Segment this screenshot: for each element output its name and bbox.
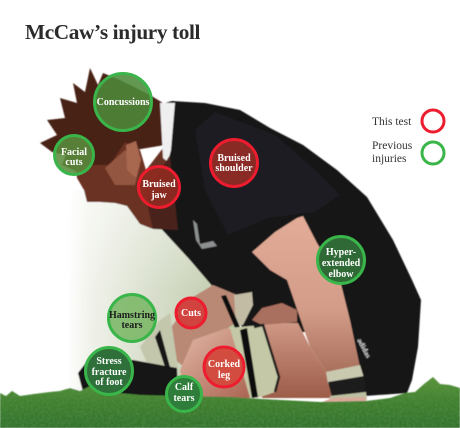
knee sock xyxy=(230,325,279,398)
callout: stress fracture of foot: Stress xyxy=(96,356,122,367)
callout: calf tears: Calf xyxy=(175,382,194,393)
callout: cuts xyxy=(176,298,206,328)
face xyxy=(75,142,168,229)
upper arm xyxy=(252,216,360,373)
callout: facial cuts: Facial xyxy=(61,147,87,158)
callout: hamstring tears: Hamstring xyxy=(109,310,155,321)
legend xyxy=(372,110,444,165)
bent-leg shin xyxy=(167,285,242,366)
callout: cuts: Cuts xyxy=(181,308,201,319)
callout: bruised shoulder: Bruised xyxy=(217,153,251,164)
legend: previous injuries: injuries xyxy=(372,153,407,165)
hand xyxy=(221,292,297,328)
fingers on grass xyxy=(320,397,368,407)
callout: hyper-extended elbow xyxy=(318,236,364,284)
callout: corked leg xyxy=(204,347,244,387)
legend: previous injuries: Previous xyxy=(372,140,413,152)
title: McCaw’s injury toll xyxy=(25,20,200,44)
boot xyxy=(78,360,178,398)
callout: hamstring tears xyxy=(108,294,156,342)
callout: bruised shoulder: shoulder xyxy=(215,163,253,174)
collar xyxy=(160,103,175,162)
jersey highlight xyxy=(195,112,340,235)
callout: facial cuts xyxy=(54,136,94,174)
callout: bruised jaw: Bruised xyxy=(142,179,176,190)
callout: stress fracture of foot: fracture xyxy=(92,367,127,378)
hair xyxy=(40,68,165,172)
jersey xyxy=(155,101,421,396)
callout: concussions xyxy=(94,74,152,130)
thigh xyxy=(250,323,335,398)
callout: bruised shoulder xyxy=(210,140,258,186)
callout: hamstring tears: tears xyxy=(121,320,143,331)
neck shadow xyxy=(145,155,178,230)
callout: calf tears xyxy=(166,376,202,412)
lower sock xyxy=(140,313,178,368)
callout: stress fracture of foot: of foot xyxy=(95,377,123,388)
bent knee xyxy=(180,328,258,398)
wrist tape xyxy=(326,365,367,402)
callout: bruised jaw xyxy=(138,166,180,208)
callout: corked leg: leg xyxy=(218,370,230,381)
callout: hyper-extended elbow: elbow xyxy=(328,269,354,280)
shorts logo: adidas xyxy=(355,337,373,359)
legend: this test: This test xyxy=(372,116,412,128)
callout: calf tears: tears xyxy=(173,393,195,404)
callout: corked leg: Corked xyxy=(208,359,241,370)
callout: facial cuts: cuts xyxy=(65,157,83,168)
pale stadium background xyxy=(68,190,238,395)
callout: concussions: Concussions xyxy=(97,97,150,108)
callout: hyper-extended elbow: extended xyxy=(322,258,361,269)
callout: stress fracture of foot xyxy=(86,348,132,394)
ear xyxy=(126,141,141,178)
callout: bruised jaw: jaw xyxy=(150,190,168,201)
grass xyxy=(0,377,460,428)
silver fern logo xyxy=(193,220,217,249)
legend: previous injuries xyxy=(372,140,444,165)
callout: hyper-extended elbow: Hyper- xyxy=(326,247,356,258)
cheek highlight xyxy=(105,150,140,185)
